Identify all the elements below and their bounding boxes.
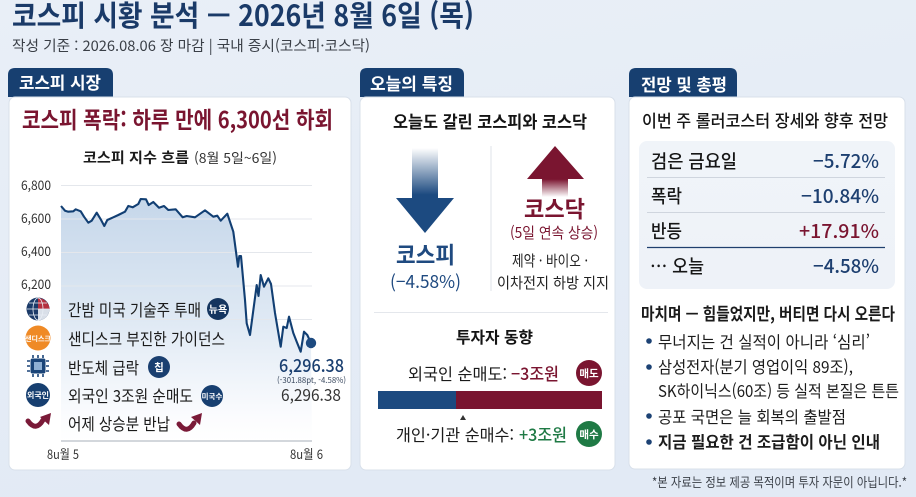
- tab: 코스피 시장: [8, 68, 113, 97]
- 코스피 label: [390, 236, 461, 294]
- closing value callout: 6,296.38: [279, 353, 344, 378]
- cause row: 외국인 3조원 순매도: 외국인 3조원 순매도: [68, 383, 193, 407]
- 코스피 label: 코스피: [396, 236, 455, 270]
- cause row: 간밤 미국 기술주 투매: 뉴욕: [209, 301, 227, 316]
- 코스닥 label: 코스닥: [524, 190, 585, 224]
- cause row: 외국인 3조원 순매도: 미국수: [202, 391, 222, 402]
- chart heading: 코스피 지수 흐름: [83, 147, 189, 168]
- table: weekly moves: 폭락: [651, 183, 682, 209]
- panel heading: 코스피 폭락: 하루 만에 6,300선 하회: [22, 101, 333, 135]
- chart heading: [83, 147, 277, 168]
- table: weekly moves: 반등: [651, 218, 682, 244]
- 코스닥 label: (5일 연속 상승): [510, 222, 598, 243]
- y axis labels: 6,800: [21, 175, 51, 194]
- panel heading: 이번 주 롤러코스터 장세와 향후 전망: [642, 107, 888, 132]
- cause row: 반도체 급락: 반도체 급락: [68, 355, 139, 379]
- x axis labels: 8u월 6: [290, 444, 323, 463]
- x axis labels: 8u월 5: [47, 444, 79, 463]
- closing bullets: SK하이닉스(60조) 등 실적 본질은 튼튼: [658, 378, 899, 402]
- x axis labels: [47, 444, 323, 463]
- closing value callout: [277, 353, 346, 406]
- table: weekly moves: 검은 금요일: [651, 148, 737, 174]
- tab: 코스피 시장: 코스피 시장: [19, 69, 101, 94]
- 코스닥 description: 제약 · 바이오 ·: [512, 250, 588, 271]
- table: weekly moves: … 오늘: [650, 253, 704, 279]
- table: weekly moves: [639, 141, 895, 289]
- stacked bar: [378, 391, 602, 420]
- investor heading: 투자자 동향: [456, 324, 533, 348]
- cause row: 반도체 급락: 칩: [154, 360, 164, 375]
- panel: 오늘의 특징: [360, 68, 615, 470]
- closing bullets: 지금 필요한 건 조급함이 아닌 인내: [658, 429, 880, 453]
- panel card: [9, 97, 351, 470]
- cause row: 어제 상승분 반납: 어제 상승분 반납: [68, 411, 170, 435]
- 코스피 label: (−4.58%): [390, 268, 461, 294]
- y axis labels: [21, 175, 51, 293]
- panel heading: 오늘도 갈린 코스피와 코스닥: [393, 108, 587, 133]
- panel card: [629, 97, 905, 469]
- cause row: 샌디스크 부진한 가이던스: 샌디스크 부진한 가이던스: [68, 326, 225, 350]
- arrow: 코스닥 상승: [527, 146, 584, 197]
- 코스닥 label: [510, 190, 598, 243]
- closing value callout: (-301.88pt, -4.58%): [277, 375, 346, 386]
- tab: 전망 및 총평: 전망 및 총평: [641, 71, 727, 96]
- foreign investors row: [408, 360, 602, 386]
- cause row: 반도체 급락: [27, 355, 170, 379]
- retail and institution row: [396, 421, 602, 447]
- 코스닥 description: 이차전지 하방 지지: [497, 272, 609, 293]
- closing bullets: 공포 국면은 늘 회복의 출발점: [658, 404, 846, 428]
- cause row: 샌디스크 부진한 가이던스: [25, 326, 225, 350]
- subtitle: 작성 기준 : 2026.08.06 장 마감 | 국내 증시(코스피·코스닥): [12, 35, 370, 56]
- panel card: [360, 97, 615, 470]
- foreign investors row: 외국인 순매도:: [408, 361, 507, 385]
- tab: 오늘의 특징: [360, 68, 464, 97]
- y axis labels: 6,600: [21, 208, 51, 227]
- 코스닥 description: [497, 250, 609, 293]
- line chart: 코스피 지수: [61, 186, 316, 441]
- retail and institution row: 개인·기관 순매수:: [396, 422, 514, 446]
- arrow: 코스피 하락: [396, 148, 454, 233]
- closing bullets: 삼성전자(분기 영업이익 89조),: [658, 354, 853, 378]
- foreign investors row: −3조원: [511, 360, 559, 385]
- retail and institution row: +3조원: [519, 421, 567, 446]
- chart heading: (8월 5일~6일): [194, 147, 277, 167]
- tab: 오늘의 특징: 오늘의 특징: [370, 70, 453, 95]
- table: weekly moves: −5.72%: [813, 147, 879, 174]
- retail and institution row: 매수: [579, 427, 599, 442]
- panel: 전망 및 총평: [629, 68, 905, 469]
- y axis labels: 6,200: [21, 274, 51, 293]
- y axis labels: 6,400: [21, 241, 51, 260]
- table: weekly moves: +17.91%: [799, 217, 879, 244]
- closing bullets: 무너지는 건 실적이 아니라 ‘심리’: [658, 329, 870, 353]
- cause row: 외국인 3조원 순매도: 외국인: [27, 390, 49, 401]
- table: weekly moves: −4.58%: [813, 252, 879, 279]
- table: weekly moves: −10.84%: [801, 182, 879, 209]
- closing bullets: [646, 329, 899, 453]
- cause row: 어제 상승분 반납: [28, 411, 202, 435]
- foreign investors row: 매도: [579, 366, 599, 381]
- closing value callout: 6,296.38: [281, 382, 341, 406]
- cause row: 샌디스크 부진한 가이던스: 샌디스크: [25, 334, 51, 344]
- panel: 코스피 시장: [8, 68, 351, 470]
- cause row: 간밤 미국 기술주 투매: 간밤 미국 기술주 투매: [68, 297, 201, 321]
